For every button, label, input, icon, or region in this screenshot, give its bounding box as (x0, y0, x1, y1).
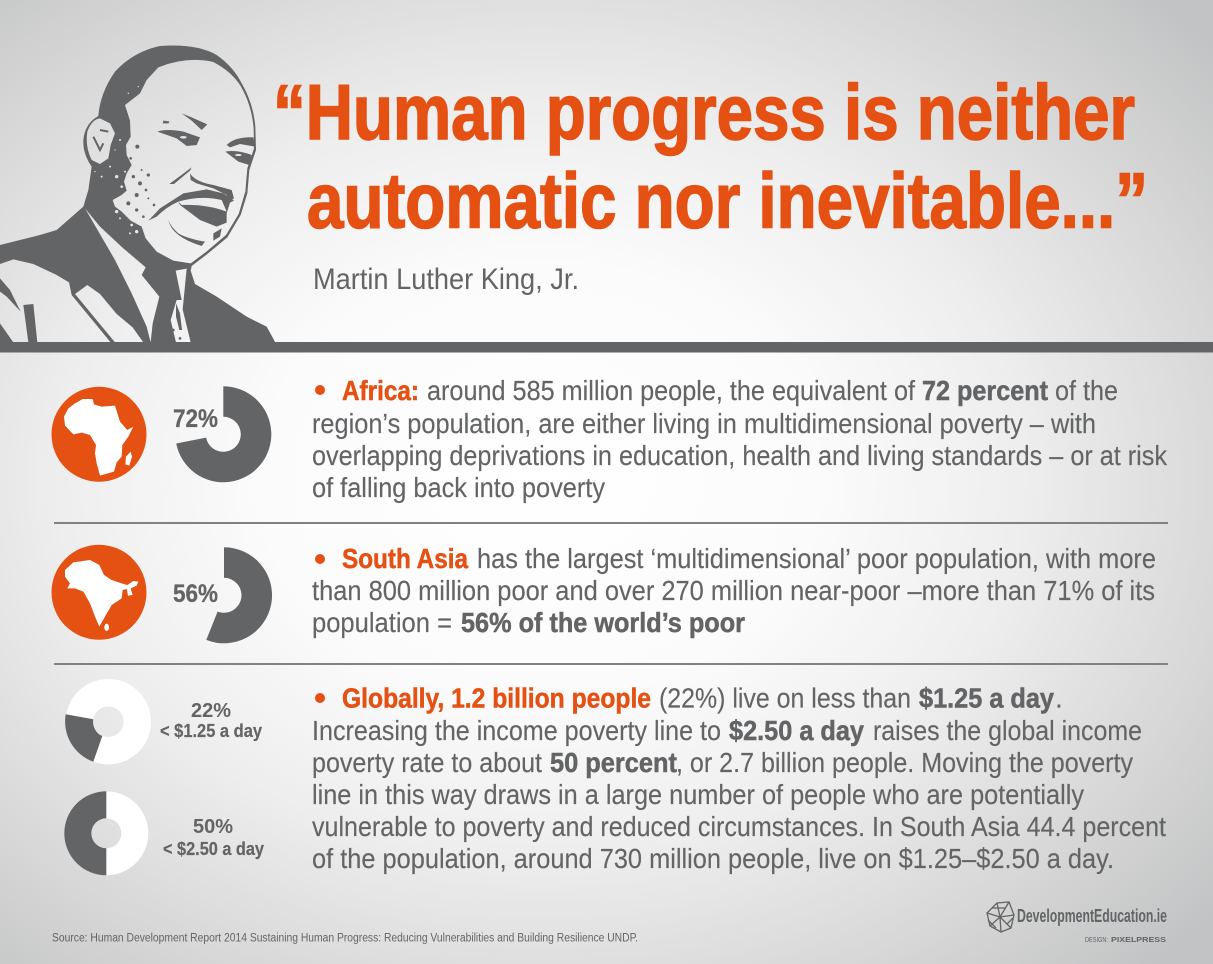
donut chart: 50% (64, 791, 148, 875)
label: 50% under $2.50: < $2.50 a day (163, 838, 265, 859)
text: Global: Increasing the income poverty line to (312, 715, 721, 746)
text: Africa: 72 percent (922, 375, 1048, 406)
text: South Asia: has the largest ‘multidimensional’ poor population, with more (477, 543, 1156, 574)
panel: Global (64, 679, 1166, 875)
icon: wireframe cube (987, 902, 1014, 932)
divider (54, 663, 1168, 665)
label: 50% under $2.50 (163, 815, 265, 859)
text: Africa: of the (1055, 375, 1118, 406)
label: 22% under $1.25: < $1.25 a day (160, 720, 263, 741)
panel: South Asia (52, 543, 1156, 643)
text: Africa: around 585 million people, the equivalent of (427, 375, 915, 406)
text: Global: $1.25 a day (919, 682, 1054, 714)
panel: Africa (52, 375, 1168, 503)
portrait: Martin Luther King, Jr. (0, 46, 275, 342)
text: South Asia: 56% of the world’s poor (461, 607, 745, 638)
text: Africa: region’s population, are either living in multidimensional poverty – with (312, 408, 1096, 439)
logo: DevelopmentEducation.ie (987, 902, 1167, 932)
header band (0, 342, 1213, 352)
label: 22% under $1.25: 22% (191, 699, 231, 722)
text: Africa (312, 375, 1168, 503)
text: South Asia: South Asia (342, 543, 468, 574)
donut chart: 72% (176, 386, 271, 482)
donut chart: 56% (206, 547, 272, 643)
title quote (273, 68, 1148, 244)
text: South Asia (312, 543, 1156, 638)
source note: Source: Human Development Report 2014 Sustaining Human Progress: Reducing Vulnerabilities and Building Resilience UNDP. (52, 932, 638, 944)
text: Global: line in this way draws in a large number of people who are potentially (312, 779, 1084, 810)
text: Global: . (1055, 682, 1063, 714)
design credit: PIXELPRESS (1111, 937, 1166, 944)
donut chart: 22% (65, 679, 151, 764)
text: Global (312, 682, 1166, 874)
text: Global: , or 2.7 billion people. Moving the poverty (676, 747, 1133, 778)
icon: South Asia map (52, 545, 146, 640)
text: Global: 50 percent (550, 747, 677, 778)
design credit: DESIGN: (1085, 937, 1108, 944)
icon: Africa map (52, 387, 146, 482)
label: 50% under $2.50: 50% (193, 815, 233, 838)
text: Africa: of falling back into poverty (312, 472, 605, 503)
text: Global: Globally, 1.2 billion people (342, 682, 651, 714)
text: Africa: Africa: (342, 375, 419, 406)
text: South Asia: than 800 million poor and over 270 million near-poor –more than 71% of its (312, 575, 1155, 606)
text: Global: $2.50 a day (729, 715, 864, 746)
label: 22% under $1.25 (160, 699, 263, 741)
design credit (1085, 937, 1166, 944)
text: Global: poverty rate to about (312, 747, 542, 778)
text: Global: (22%) live on less than (659, 682, 911, 714)
quote attribution: Martin Luther King, Jr. (313, 263, 579, 296)
text: South Asia: population = (312, 607, 452, 638)
divider (54, 522, 1168, 524)
label: 56%: 56% (173, 580, 218, 608)
label: 72%: 72% (173, 405, 218, 433)
text: Global: of the population, around 730 million people, live on $1.25–$2.50 a day. (312, 843, 1114, 874)
text: Global: raises the global income (873, 715, 1142, 746)
